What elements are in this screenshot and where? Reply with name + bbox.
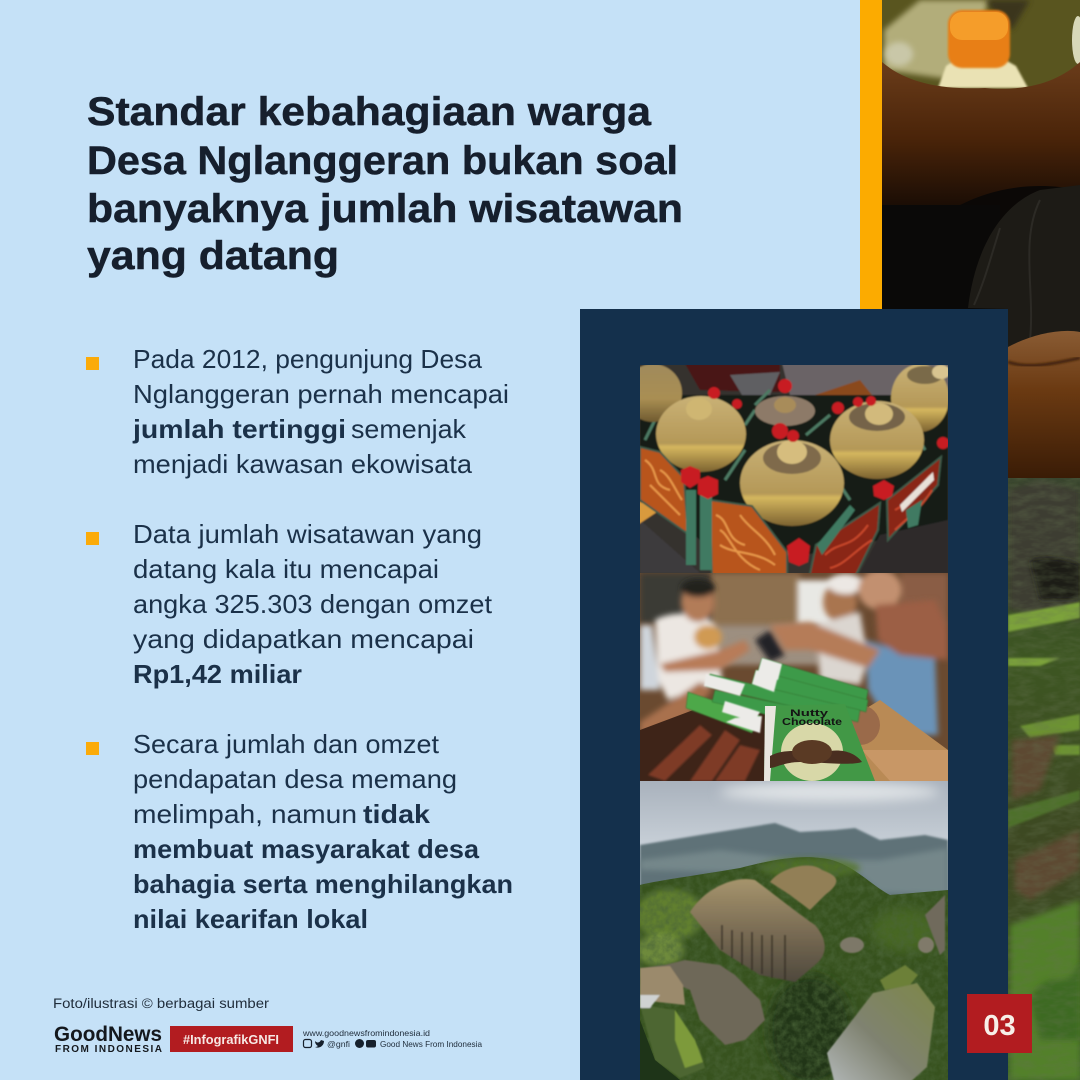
photo: people with chocolate packs: Chocolate	[782, 717, 843, 728]
title: banyaknya jumlah wisatawan	[87, 187, 683, 231]
accent bar: yellow	[860, 0, 882, 309]
bullet point: income and happiness: tidak	[363, 799, 431, 829]
chocolate tray	[640, 710, 765, 781]
chocolate bars	[686, 658, 868, 733]
panel: navy photo frame	[580, 309, 1008, 1080]
bullet marker	[86, 532, 99, 545]
icon: youtube	[366, 1040, 376, 1048]
bullet marker	[86, 357, 99, 370]
bullet point: income and happiness: bahagia serta menghilangkan	[133, 869, 513, 899]
bullet point: visitor data: datang kala itu mencapai	[133, 554, 439, 584]
social media links: www.goodnewsfromindonesia.id	[302, 1028, 430, 1038]
logo: GoodNews From Indonesia: GoodNews	[54, 1023, 162, 1046]
red finials	[681, 379, 949, 566]
bullet point: highest visitors: Nglanggeran pernah mencapai	[133, 379, 509, 409]
bullet point: visitor data: Data jumlah wisatawan yang	[133, 519, 482, 549]
bullet marker	[86, 742, 99, 755]
pot cluster	[624, 364, 950, 526]
photo: green terraces, right edge	[1008, 478, 1080, 1080]
bullet point: income and happiness: membuat masyarakat desa	[133, 834, 480, 864]
photo: hand and bottle, top right	[882, 0, 1080, 478]
bullet point: income and happiness: melimpah, namun	[133, 799, 357, 829]
social media links: @gnfi	[327, 1039, 350, 1049]
bullet point: highest visitors: semenjak	[351, 414, 467, 444]
bullet point: income and happiness	[86, 729, 513, 934]
logo: GoodNews From Indonesia: FROM INDONESIA	[55, 1044, 162, 1055]
photo credit: Foto/ilustrasi © berbagai sumber	[53, 996, 270, 1011]
hashtag badge: #InfografikGNFI	[183, 1033, 279, 1047]
bullet point: highest visitors: jumlah tertinggi	[132, 414, 346, 444]
bullet point: visitor data: Rp1,42 miliar	[133, 659, 302, 689]
social media links: Good News From Indonesia	[380, 1039, 482, 1049]
bullet point: income and happiness: pendapatan desa memang	[133, 764, 457, 794]
blurred people	[640, 570, 948, 735]
title	[87, 90, 683, 278]
photo: people with chocolate packs	[640, 573, 948, 781]
green posts	[686, 490, 922, 570]
icon: twitter	[315, 1040, 324, 1048]
bullet point: visitor data	[86, 519, 493, 689]
chocolate box	[764, 704, 875, 781]
icon: facebook	[355, 1039, 364, 1048]
bullet point: income and happiness: Secara jumlah dan omzet	[133, 729, 440, 759]
green rims around pots	[645, 390, 925, 500]
page number badge	[967, 994, 1032, 1053]
title: Standar kebahagiaan warga	[87, 90, 652, 134]
photo: people with chocolate packs: Nutty	[790, 708, 829, 719]
carved panels	[640, 447, 941, 583]
title: Desa Nglanggeran bukan soal	[87, 139, 678, 183]
bullet point: income and happiness: nilai kearifan lokal	[133, 904, 368, 934]
bullet point: highest visitors: menjadi kawasan ekowisata	[133, 449, 473, 479]
photo: gamelan pots	[640, 365, 948, 573]
bullet point: visitor data: angka 325.303 dengan omzet	[133, 589, 493, 619]
social media links	[302, 1028, 482, 1049]
icon: instagram	[304, 1040, 312, 1048]
bullet point: highest visitors	[86, 344, 509, 479]
page number badge: 03	[983, 1010, 1016, 1042]
photo: karst mountain landscape	[630, 771, 958, 1080]
hashtag badge	[170, 1026, 293, 1052]
title: yang datang	[87, 234, 339, 278]
bullet point: highest visitors: Pada 2012, pengunjung Desa	[133, 344, 483, 374]
bullet point: visitor data: yang didapatkan mencapai	[133, 624, 474, 654]
rock formations	[640, 866, 945, 1080]
